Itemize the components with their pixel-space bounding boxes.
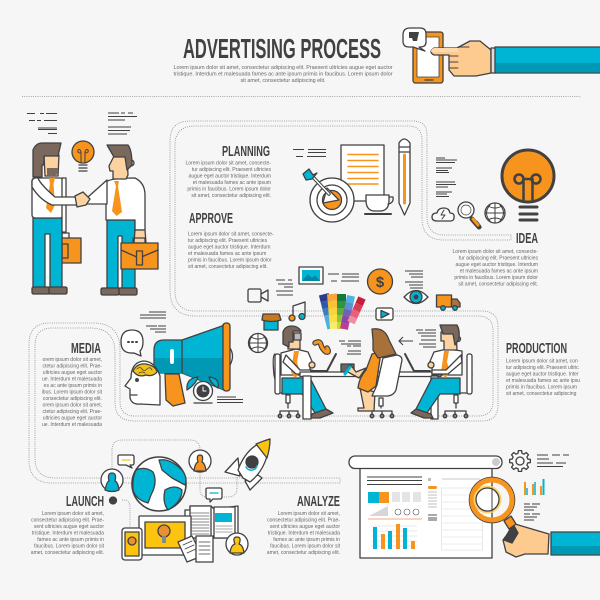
text: analyze: faucibus. Lorem ipsum dolor sit: [270, 544, 341, 550]
text: launch: amet, consectetur adipiscing elit.: [31, 550, 104, 556]
icon: small bar chart: [525, 479, 544, 495]
text: analyze: tristique. Interdum et malesuada: [268, 530, 340, 536]
text: media: orem ipsum dolor sit amet,: [43, 402, 102, 408]
panel: team meeting: [273, 325, 472, 419]
text lines: planning: [293, 150, 326, 156]
text: launch: Lorem ipsum dolor sit amet,: [42, 511, 104, 517]
icon: rocket: [225, 439, 270, 490]
icon: music notes: [289, 302, 305, 321]
text: analyze: sent ultricies augue eget auctor: [270, 524, 340, 530]
icon: smartphone: [122, 528, 142, 560]
intro text: tristique. Interdum et malesuada fames ac ante ipsum primis in faucibus. Lorem ipsum dolor: [173, 72, 393, 78]
text: approve: primis in faucibus. Lorem ipsum dolor: [188, 258, 272, 264]
text: media: ibus. Lorem ipsum dolor sit: [42, 390, 103, 396]
icon: launch globe: [132, 457, 186, 511]
icon: coffee cup: [365, 195, 393, 214]
text: idea: sit amet, consectetur adipiscing elit.: [458, 282, 538, 288]
icon: gear: [510, 451, 530, 471]
icon: handshake hands: [75, 192, 90, 207]
icon: pencil: [399, 139, 410, 215]
icon: video camera: [248, 289, 268, 302]
icon: globe idea: [485, 203, 505, 223]
text: approve: augue eget auctor tristique. Interdum: [188, 244, 270, 250]
intro text: sit amet, consectetur adipiscing elit.: [240, 78, 326, 84]
text lines: production middle: [328, 274, 359, 281]
icon: dollar coin: $: [376, 274, 385, 291]
text: production: tur adipiscing elit. Praesent ultric: [506, 365, 579, 371]
text: idea: et malesuada fames ac ante ipsum: [460, 268, 538, 274]
icon: cloud: [432, 208, 454, 221]
icon: blue chat bubble: [206, 488, 222, 502]
left man: [32, 143, 78, 294]
panel: presentation board: [349, 456, 502, 558]
text: approve: et malesuada fames ac ante ipsum: [188, 251, 266, 257]
text lines: left man: [27, 114, 57, 134]
text: launch: tristique. Interdum et malesuada: [32, 530, 104, 536]
icon: dollar coin: [368, 269, 392, 294]
text: planning: et malesuada fames ac ante ipsum: [193, 180, 271, 186]
icon: target and arrow: [303, 169, 354, 222]
icon: store: [262, 314, 281, 330]
text: analyze: Lorem ipsum dolor sit amet,: [278, 511, 340, 517]
icon: eye: [404, 290, 428, 304]
icon: person left: [101, 469, 123, 492]
icon: telephone handset: [315, 342, 328, 352]
panel: handshake businessmen: [32, 143, 158, 295]
text lines: meeting: [339, 341, 361, 354]
text: idea: augue eget auctor tristique. Interdum: [456, 262, 538, 268]
intro text: Lorem ipsum dolor sit amet, consectetur adipiscing elit. Praesent ultricies augue eget auctor: [173, 65, 393, 71]
text: planning: augue eget auctor tristique. Interdum: [189, 174, 271, 180]
text: launch play icon: [110, 497, 116, 504]
text: media: ue. Interdum et malesuada: [42, 422, 102, 428]
text lines: production right: [405, 271, 423, 288]
text: media: ue. Interdum et malesuada: [42, 376, 102, 382]
text: planning: primis in faucibus. Lorem ipsum dolor: [187, 186, 271, 192]
icon: yellow chat bubble: [118, 455, 134, 468]
text lines: right man: [108, 113, 137, 134]
icon: head with brain: [125, 361, 160, 405]
text: idea: tur adipiscing elit. Praesent ultricies: [459, 256, 538, 262]
text: production: [506, 358, 580, 397]
icon: left briefcase: [46, 233, 81, 263]
text: production: Lorem ipsum dolor sit amet, con: [506, 358, 578, 364]
icon: monitor: [139, 516, 191, 555]
title: ADVERTISING PROCESS: [183, 33, 381, 64]
table: [300, 372, 441, 419]
left worker: [273, 326, 336, 418]
text: launch: faucibus. Lorem ipsum dolor sit: [34, 544, 105, 550]
icon: play box: [376, 308, 393, 320]
text: approve: [188, 232, 274, 270]
text: media: es ac ante ipsum primis in: [44, 383, 102, 389]
text: planning: Lorem ipsum dolor sit amet, consecte-: [185, 160, 271, 166]
icon: magnifier and hand: [471, 479, 600, 557]
text: production: sit amet, consectetur adipiscing: [506, 391, 577, 397]
text: analyze: consectetur adipiscing elit. Prae-: [267, 518, 340, 524]
text lines: production left: [276, 280, 293, 295]
text lines: idea: [436, 158, 457, 196]
icon: paper sheets: [178, 536, 213, 562]
icon: picture frame: [299, 267, 323, 284]
text: media: ultricies augue eget auctor: [43, 370, 102, 376]
text: media: ultricies augue eget auctor: [43, 416, 102, 422]
icon: alarm clock: [187, 377, 218, 403]
text: idea: [452, 249, 538, 288]
text: approve: sit amet, consectetur adipiscing elit.: [188, 264, 268, 270]
text: analyze: amet, consectetur adipiscing elit.: [267, 550, 340, 556]
text: media: consectetur adipiscing elit.: [43, 396, 102, 402]
icon: speech bubble: [121, 330, 143, 356]
text: launch: consectetur adipiscing elit. Prae-: [31, 518, 104, 524]
icon: right briefcase: [121, 238, 158, 269]
text: idea: Lorem ipsum dolor sit amet, consecte-: [452, 249, 538, 255]
text: planning: [185, 160, 271, 199]
text: analyze: fames ac ante ipsum primis in: [273, 537, 340, 543]
right man: [87, 145, 146, 295]
icon: magnifier: [458, 202, 479, 227]
intro text: [173, 65, 393, 84]
text: media: [42, 357, 103, 428]
icon: globe production: [248, 334, 268, 352]
text: production: et malesuada fames ac ante ipsu: [506, 378, 580, 384]
text lines: megaphone: [140, 312, 243, 402]
text: production: augue eget auctor tristique. Inter: [506, 372, 579, 378]
woman: [341, 329, 402, 418]
text: launch: [31, 511, 105, 556]
text: planning: sit amet, consectetur adipiscing elit.: [191, 193, 271, 199]
icon: person top: [189, 450, 211, 472]
text: media: orem ipsum dolor sit amet,: [43, 357, 102, 363]
text: production: primis in faucibus. Lorem ipsum: [506, 384, 577, 390]
heading: idea: IDEA: [516, 230, 538, 247]
icon: open book: [185, 506, 238, 538]
icon: small bulb: [72, 141, 94, 171]
icon: megaphone: [154, 323, 232, 406]
text: analyze: [267, 511, 341, 556]
text: media: ctetur adipiscing elit. Prae-: [43, 409, 102, 415]
text: launch: sent ultricies augue eget auctor: [34, 524, 104, 530]
text: idea: primis in faucibus. Lorem ipsum dolor: [454, 275, 538, 281]
text: media: ctetur adipiscing elit. Prae-: [43, 364, 102, 370]
heading: planning: PLANNING: [222, 143, 270, 160]
text: planning: tur adipiscing elit. Praesent ultricies: [192, 167, 271, 173]
heading: analyze: ANALYZE: [297, 493, 340, 510]
text: approve: tur adipiscing elit. Praesent ultricies: [188, 238, 268, 244]
heading: approve: APPROVE: [189, 210, 233, 227]
text: launch: fames ac ante ipsum primis in: [37, 537, 104, 543]
icon: hand tapping phone: [403, 28, 600, 83]
network dotted lines: [112, 440, 237, 528]
text lines: analyze bottom: [524, 504, 540, 520]
right worker: [405, 325, 472, 418]
heading: launch: LAUNCH: [66, 493, 104, 510]
icon: person bottom: [226, 533, 248, 555]
text: approve: Lorem ipsum dolor sit amet, consecte-: [188, 232, 274, 238]
text lines: worker: [416, 330, 436, 347]
icon: delivery truck: [436, 295, 460, 310]
text lines: analyze top: [537, 455, 569, 466]
heading: media: MEDIA: [71, 340, 101, 357]
icon: big lightbulb: [502, 150, 554, 220]
icon: planning document: [341, 145, 384, 201]
arrow: to worker: [399, 337, 413, 345]
icon: colour palette fan: [319, 293, 366, 330]
